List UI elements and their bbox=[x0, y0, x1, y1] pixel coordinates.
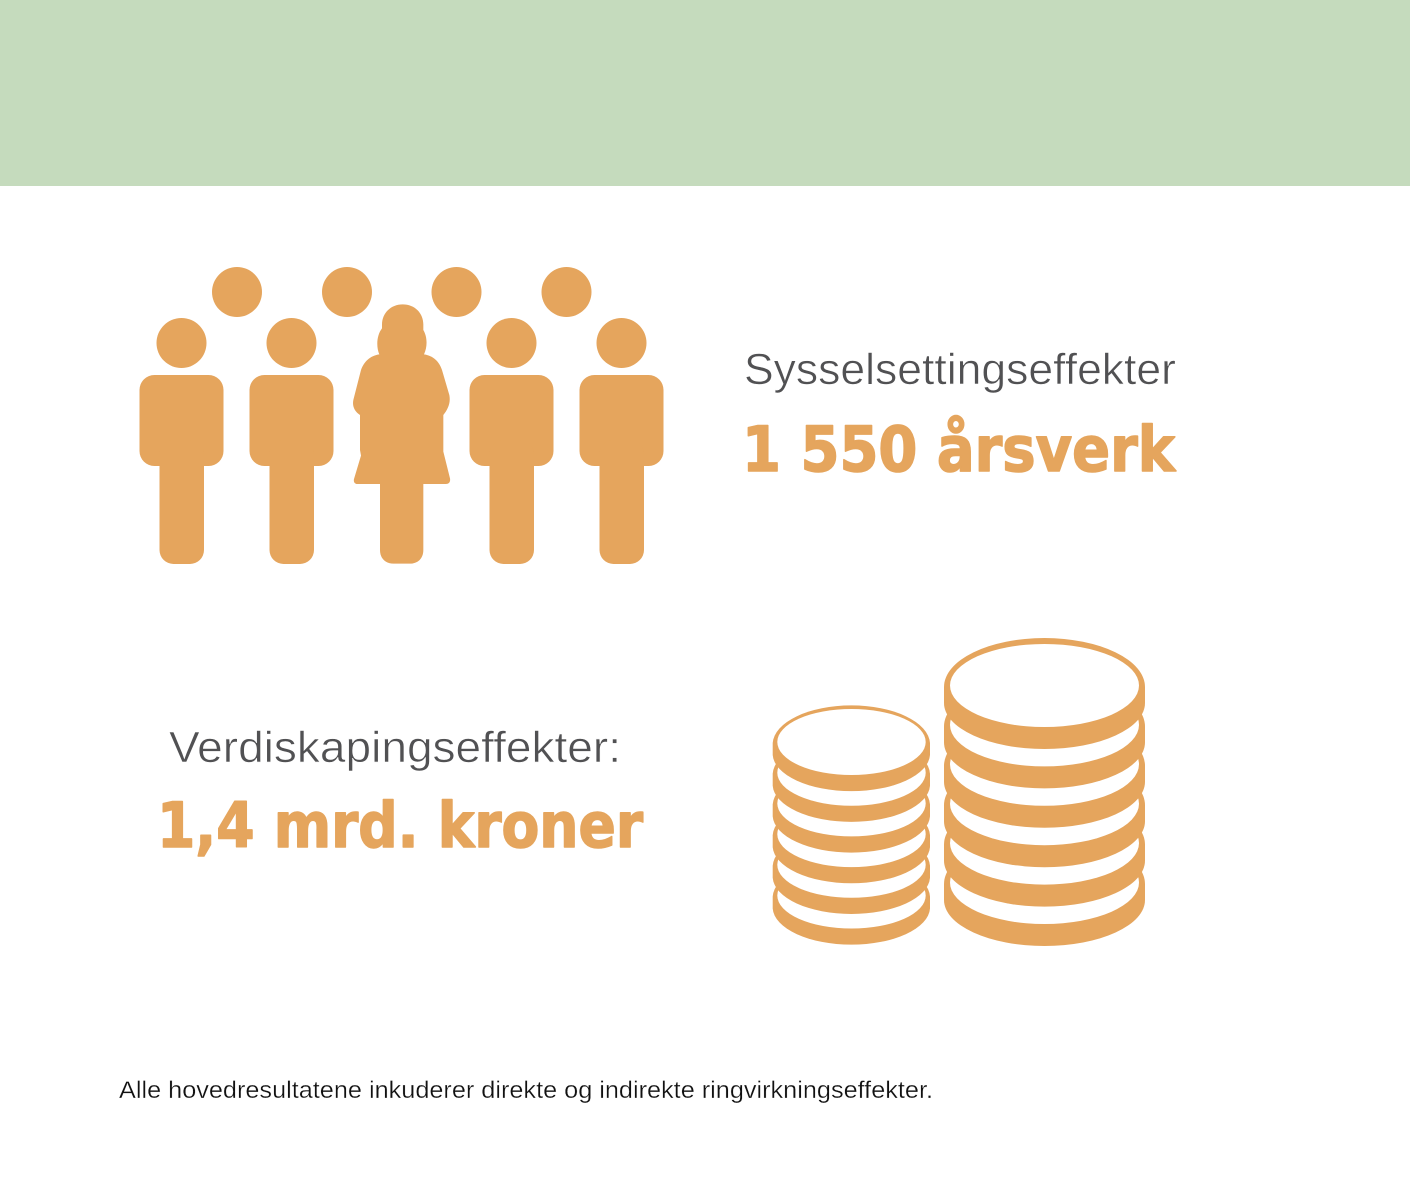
employment label: Sysselsettingseffekter bbox=[744, 345, 1176, 394]
icon: group of people bbox=[140, 267, 664, 564]
value creation effects text bbox=[157, 723, 643, 862]
value creation label: Verdiskapingseffekter: bbox=[169, 723, 621, 772]
employment value: 1 550 årsverk bbox=[742, 413, 1177, 486]
icon: large coin stack bbox=[944, 638, 1145, 946]
footnote: Alle hovedresultatene inkuderer direkte og indirekte ringvirkningseffekter. bbox=[119, 1077, 933, 1104]
icon: small coin stack bbox=[773, 705, 930, 945]
value creation amount: 1,4 mrd. kroner bbox=[157, 789, 643, 862]
employment effects text bbox=[742, 345, 1177, 486]
top banner bbox=[0, 0, 1410, 186]
